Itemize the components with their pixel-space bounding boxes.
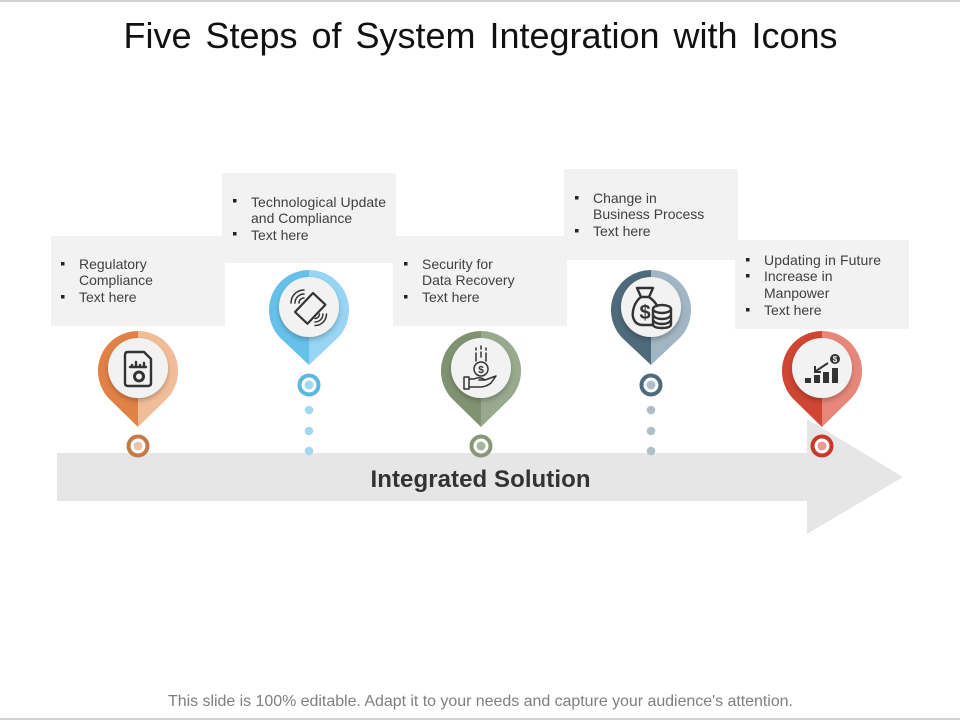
panel: security for data recovery: Data Recovery	[422, 272, 515, 288]
panel: security for data recovery: Text here	[422, 289, 480, 305]
icon: dollar sign: $	[478, 365, 484, 376]
panel: regulatory compliance: Text here	[79, 289, 137, 305]
pin 3: green	[441, 331, 521, 427]
pin 5: red	[782, 331, 862, 427]
pin 2: blue	[269, 270, 349, 365]
panel: change in business process: Text here	[593, 223, 651, 239]
panel: change in business process: Change in	[593, 190, 657, 206]
panel: technological update: and Compliance	[251, 210, 352, 226]
panel: updating in future: Manpower	[764, 285, 830, 301]
icon: money bag and coins	[633, 288, 671, 328]
arrow: integrated solution: Integrated Solution	[370, 466, 590, 493]
icon: report document	[125, 352, 151, 386]
icon: coin over hand	[464, 346, 496, 389]
panel: updating in future: Updating in Future	[764, 252, 881, 268]
ring 1	[128, 436, 148, 456]
footer note: This slide is 100% editable. Adapt it to your needs and capture your audience's attention.	[168, 693, 793, 710]
pin 4: slate	[611, 270, 691, 365]
panel: technological update: Text here	[251, 227, 309, 243]
panel: security for data recovery: Security for	[422, 256, 493, 272]
arrow: integrated solution	[57, 419, 903, 534]
ring 5	[812, 436, 832, 456]
pin 1: orange	[98, 331, 178, 427]
panel: regulatory compliance: Regulatory	[79, 256, 147, 272]
ring and dots 4	[642, 376, 660, 455]
panel: technological update: Technological Update	[251, 194, 386, 210]
panel: regulatory compliance	[51, 236, 225, 326]
icon: growth bars: $	[833, 355, 838, 364]
panel: change in business process	[564, 169, 738, 260]
title: Five Steps of System Integration with Icons	[124, 15, 838, 56]
panel: security for data recovery	[393, 236, 567, 326]
panel: updating in future	[735, 240, 909, 329]
panel: updating in future: Increase in	[764, 268, 832, 284]
ring and dots 2	[300, 376, 318, 455]
icon: vibrating phone	[291, 290, 326, 326]
panel: updating in future: Text here	[764, 302, 822, 318]
ring 3	[472, 436, 490, 456]
icon: dollar sign: $	[639, 302, 651, 324]
panel: technological update	[222, 173, 396, 263]
panel: regulatory compliance: Compliance	[79, 272, 153, 288]
panel: change in business process: Business Process	[593, 206, 704, 222]
